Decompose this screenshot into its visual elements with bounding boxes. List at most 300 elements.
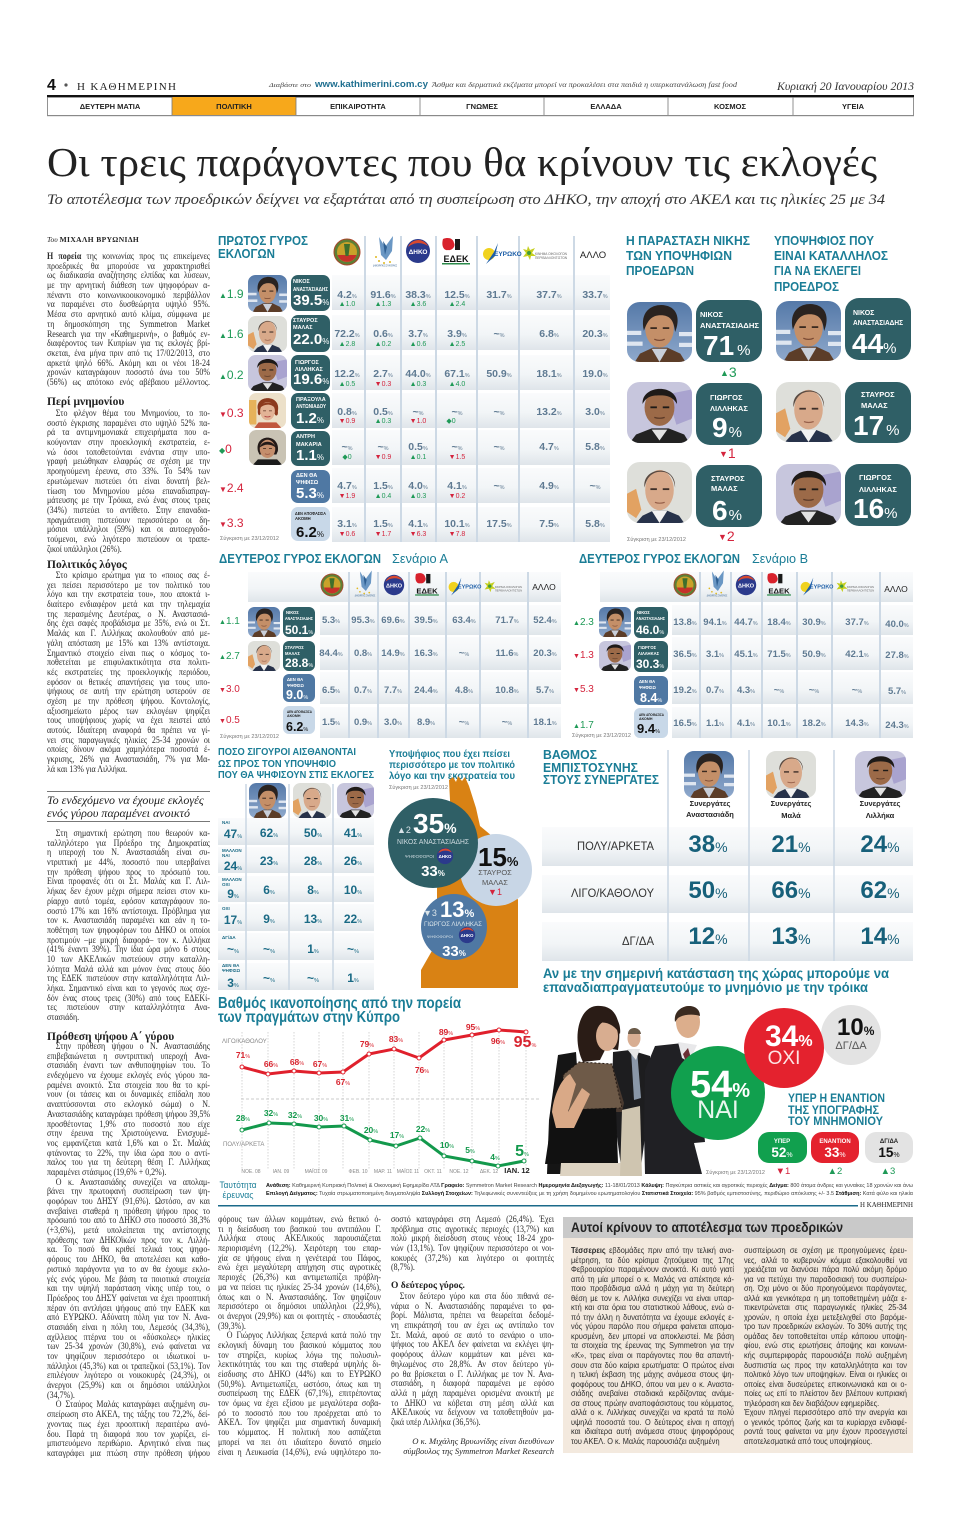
first round values: ▲0.3 (410, 381, 426, 388)
article: political speech: Μαλάς και Γ. Λιλλήκας ακολουθούν από με- (47, 628, 210, 638)
values: 71.5% (767, 649, 791, 660)
values: ~% (459, 648, 469, 659)
scenario A heading: ΔΕΥΤΕΡΟΣ ΓΥΡΟΣ ΕΚΛΟΓΩΝ (219, 551, 381, 566)
first round values: 0.8% (337, 406, 357, 418)
values: 50% (304, 826, 322, 840)
heading: memorandum: Περί μνημονίου (47, 396, 124, 408)
row labels: ΔΕΝ ΘΑ (222, 963, 240, 968)
candidate changes: ▲1.6 (219, 327, 244, 341)
article: memorandum: νώ όσοι τοποθετούνται ενάντια στην υπο- (47, 447, 210, 457)
values: 94.1% (703, 617, 727, 628)
circle: no votes 10 (821, 1005, 881, 1065)
article: second round: φοφόρους άλλων κομμάτων και μένει κα- (391, 1349, 554, 1359)
article: third column (391, 1214, 554, 1272)
article: second round: ΑΚΕΛικούς να δείχνουν να τοποθετηθούν μα- (391, 1407, 554, 1417)
article: opening paragraph: Research για την «Καθημερινή», ο βαθμός εν- (47, 328, 210, 338)
article: suitability: η υπεροχή του Ν. Αναστασιάδη είναι συ- (47, 847, 210, 857)
navigation bar: ΕΠΙΚΑΙΡΟΤΗΤΑ (330, 102, 386, 111)
first round values: ▼6.3 (410, 531, 426, 538)
captions: Συνεργάτες (690, 799, 731, 808)
panel text: decisive factors right: νες, αλλά το κυβερνών κόμμα εξακολουθεί να (744, 1255, 907, 1265)
values: 24% (224, 859, 242, 873)
panel text: decisive factors right: ση. Όχι μόνο οι δύο προηγούμενοι παράγοντες, (744, 1283, 907, 1293)
first round values: ◆0 (342, 454, 352, 461)
panel text: decisive factors right: δυσπιστία ως προς την καταλληλότητα και τον (744, 1360, 907, 1370)
values: 16.5% (673, 718, 697, 729)
Lillikas 16: ΓΙΩΡΓΟΣ (859, 473, 892, 482)
article: vote intention: ριστικό παράγοντα για το αν θα έχουμε εκλο- (47, 1264, 210, 1274)
article: opening paragraph: ως διαδικασία αναζήτησης ελπίδας και λύσεων, (47, 270, 210, 280)
candidate name boxes: ΨΗΦΙΣΩ (296, 480, 319, 486)
Anastasiades 71: ΝΙΚΟΣ (700, 310, 723, 319)
name boxes: 9.4% (637, 721, 660, 736)
article: political speech: κές εκστρατείες της προεκλογικής περιόδου, (47, 667, 210, 677)
row labels: ΟΧΙ (222, 882, 230, 887)
Lillikas 16 (845, 464, 911, 526)
survey identity label: Ταυτότητα (220, 1180, 257, 1191)
box: dk 15: ΔΓ/ΔΑ (880, 1139, 899, 1145)
values: ~% (502, 717, 512, 728)
article: memorandum: μάτευσης με την Τρόικα, ενώ ένας στους τρεις (47, 495, 210, 505)
circle: Lillikas 13 (421, 894, 487, 960)
survey identity strip (218, 1180, 914, 1209)
article: vote intention: κα. Το ποσό θα κριθεί τελικά τους ψηφο- (47, 1244, 210, 1254)
first round values: ▼0.2 (449, 493, 465, 500)
first round values: ▼0.3 (375, 381, 391, 388)
panel text: decisive factors right: οποίες είναι δυσεύρετες επικοινωνιακά και οι ο- (744, 1379, 907, 1389)
values: 4.3% (737, 685, 755, 696)
circle: Anastasiades 35: 35% (413, 808, 457, 839)
party logos: ΑΛΛΟ (884, 584, 908, 594)
article: suitability (47, 828, 210, 1022)
candidate name boxes: 1.1% (296, 447, 324, 464)
candidate changes: ▼3.3 (219, 516, 244, 530)
values (319, 615, 557, 728)
article: second column: ΑΚΕΛ. Τον ψηφίζει μια σημαντική δυναμική (218, 1417, 381, 1427)
article: vote intention: στην έρευνα της Χριστούγεννα. Ενισχυμέ- (47, 1128, 210, 1138)
renegotiation heading: επαναδιαπραγματευτούμε το μνημόνιο με την τρόικα (543, 979, 868, 995)
comparison note: Σύγκριση με 23/12/2012 (706, 1169, 765, 1176)
candidate name boxes: ΑΚΟΜΗ (295, 516, 311, 521)
row labels (222, 820, 242, 973)
article: second column: μα να πείσει τις ηλικίες 25-34 χρονών (14,6%), (218, 1282, 381, 1292)
panel text: decisive factors right: πικεντρώνεται στις παραγωγικές ηλικίες 25-34 (744, 1302, 907, 1312)
circle: Anastasiades 35: ΔΗΚΟ (439, 854, 452, 859)
article: second round: Στ. Μαλά, αφού σε αυτό το σενάριο ο υπο- (391, 1330, 554, 1340)
name boxes (634, 607, 668, 738)
article: second column: (39,3%). (218, 1321, 246, 1331)
party logos (334, 236, 606, 268)
newspaper name: Η ΚΑΘΗΜΕΡΙΝΗ (77, 81, 176, 93)
web promo: www.kathimerini.com.cy (314, 79, 429, 90)
article: vote intention: βάνει την πρωτοφανή συσπείρωση των ψη- (47, 1186, 210, 1196)
panel: memorandum (545, 1005, 913, 1177)
article: vote intention: σπείρωση στο ΑΚΕΛ, της τάξης του 72,2%, δεί- (47, 1409, 210, 1419)
first round heading: ΕΚΛΟΓΩΝ (218, 246, 275, 261)
circle: no 34: 34% (765, 1020, 813, 1053)
article: vote intention: στασιάδη έναντι των ανθυποψηφίων του. Το (47, 1060, 210, 1070)
article: vote intention: πρόθεσης των ΔΗΚΟϊκών προς τον κ. Λιλλή- (47, 1235, 210, 1245)
circle: Anastasiades 35: ΨΗΦΟΦΟΡΟΙ (405, 854, 434, 859)
series: not satisfied: 67% (313, 1059, 327, 1069)
axis labels: ΙΑΝ. 09 (273, 1169, 290, 1175)
changes: ▲2.3 (573, 617, 594, 628)
party logos: ΔΗΜΟΚΡΑΤΙΚΟΣ ΣΥΝΑΓΕΡΜΟΣ (707, 593, 727, 597)
article: second round: θηλωμένος στο 28,8%. Αν στον δεύτερο γύ- (391, 1359, 554, 1369)
trust heading (543, 748, 659, 787)
name boxes: ΔΕΝ ΑΠΟΦΑΣΙΣΑ (639, 713, 664, 717)
article: opening paragraph: διαφέροντος των Κυπρίων για τις εκλογές βρί- (47, 338, 210, 348)
first round values: ▼0.9 (339, 418, 355, 425)
article: suitability: την πρόθεση ψήφου προς το πρόσωπό του. (47, 867, 210, 877)
panel text: decisive factors left: «Κ», τρεις είναι οι παράγοντες που θα απαντή- (571, 1350, 734, 1360)
series: satisfied: 31% (340, 1113, 354, 1123)
first round heading (218, 233, 308, 261)
values: 37.7% (845, 617, 869, 628)
first round values: 3.1% (337, 518, 357, 530)
party logos: ΚΙΝΗΜΑ ΟΙΚΟΛΟΓΩΝ (847, 585, 874, 589)
comparison note: Σύγκριση με 23/12/2012 (572, 732, 631, 739)
article: vote intention: φοφόρων του ΔΗΣΥ (91,6%). Ωστόσο, αν και (47, 1196, 210, 1206)
article: vote intention: φτάνοντας το 22%, την ίδια ώρα που ο αντί- (47, 1148, 210, 1158)
article: memorandum (47, 408, 210, 554)
first round values: ▲0.1 (410, 454, 426, 461)
article: suitability: ποθέτηση των ψηφοφόρων του ΔΗΚΟ οι οποίοι (47, 925, 210, 935)
axis labels: ΟΚΤ. 11 (424, 1169, 442, 1175)
circle: Malas 15: ΣΤΑΥΡΟΣ (478, 868, 512, 877)
candidate name boxes: ΑΝΤΡΗ (296, 434, 315, 440)
article: vote intention: ενδεχόμενο να έχουμε εκλογές ενός γύρου πα- (47, 1070, 210, 1080)
comparison note: Σύγκριση με 23/12/2012 (220, 733, 279, 740)
article: vote intention: γές ενός γύρου. Με βάση τα ποιοτικά στοιχεία (47, 1274, 210, 1284)
article: vote intention: ραμένει ανοικτό. Στα στοιχεία που θα το κρί- (47, 1080, 210, 1090)
series: not satisfied: 76% (415, 1065, 429, 1075)
first round values: 19.0% (582, 368, 608, 380)
circle: Anastasiades 35: ▲2 (397, 825, 411, 835)
heading: political speech: Πολιτικός λόγος (47, 559, 127, 571)
values: 5.3% (322, 615, 340, 626)
article: second round: ζικά υπέρ Λιλλήκα (36,5%). (391, 1417, 481, 1427)
circle: Anastasiades 35 (388, 798, 478, 888)
first round values: ~% (412, 406, 424, 418)
article: vote intention: επιβεβαιώνεται η συντριπτική υπεροχή Ανα- (47, 1051, 210, 1061)
candidate changes: ◆0 (219, 442, 232, 456)
circle: Lillikas 13: 13% (440, 897, 474, 922)
values: 63.4% (452, 615, 476, 626)
candidate changes: ▲1.9 (219, 287, 244, 301)
article: opening paragraph: αρκετά ψηλό 66%. Ακόμη και οι νέοι 18-24 (47, 358, 210, 368)
panel text: decisive factors left: σα στους πρώην αναποφάσιστους του κόμματος, (571, 1398, 734, 1408)
memorandum heading: ΥΠΕΡ Η ΕΝΑΝΤΙΟΝ (788, 1093, 885, 1105)
first round values: ▼0.9 (375, 454, 391, 461)
first round values: ~% (493, 441, 505, 453)
candidate name boxes: 5.3% (296, 485, 324, 502)
circle: Malas 15: ▼1 (488, 887, 502, 897)
article: second column: είσδυσης στο ΔΗΚΟ (44%) και το ΕΥΡΩΚΟ (218, 1369, 381, 1379)
series: satisfied: 5% (515, 1143, 529, 1160)
article: second round: νη επικράτησή του αν έχει ως αντίπαλο τον (391, 1320, 554, 1330)
name boxes: ΑΝΑΣΤΑΣΙΑΔΗΣ (285, 616, 313, 621)
candidate name boxes: ΑΝΤΩΝΙΑΔΟΥ (296, 404, 326, 410)
article: suitability: ταλληλότερο για Πρόεδρο της Δημοκρατίας (47, 838, 210, 848)
values: 3.0% (384, 717, 402, 728)
panel text: decisive factors left: θέση με τον κ. Λιλλήκα συνεχίζει να είναι υπαρ- (571, 1293, 734, 1303)
row labels: ΜΑΛΛΟΝ (222, 848, 242, 853)
suitability heading: ΠΡΟΕΔΡΟΣ (774, 280, 839, 294)
article: memorandum: Στο φλέγον θέμα του Μνημονίου, το πο- (56, 408, 210, 418)
circle: Lillikas 13: 33% (442, 943, 466, 960)
candidate name boxes: 39.5% (293, 292, 329, 309)
panel text: decisive factors left: σιάδης ανεβαίνει σταδιακά κερδίζοντας ανάμε- (571, 1388, 734, 1398)
first round values: 4.7% (539, 441, 559, 453)
row labels: ΝΑΙ (222, 853, 230, 858)
article: suitability: λότητα Μαλά αλλά και μόνον ένας στους δύο (47, 964, 210, 974)
article: vote intention: Στην πρόθεση ψήφου ο Ν. Αναστασιάδης (56, 1041, 210, 1051)
first round values: 33.7% (582, 289, 608, 301)
first round values: 4.1% (447, 480, 467, 492)
values (224, 826, 362, 990)
panel text: decisive factors right: φίου, ενώ στις ερωτήσεις άποψης και κοινωνι- (744, 1340, 907, 1350)
article: third column: νών (13,1%). Τον ψηφίζουν περισσότερο οι νοι- (391, 1243, 554, 1253)
series: satisfied: 30% (314, 1113, 328, 1123)
circle: no votes 10: 10% (837, 1014, 875, 1041)
series: satisfied: 22% (416, 1124, 430, 1134)
chart heading: των πραγμάτων στην Κύπρο (218, 1009, 400, 1026)
web promo: Άσθμα και δερματικά εκζέματα μπορεί να προκαλέσει στα παιδιά η υπερκατανάλωση fast food (431, 81, 738, 89)
values: 71.7% (495, 615, 519, 626)
values: 14% (860, 923, 900, 950)
article: political speech: γάλη απόσταση με 15% και 13% αντίστοιχα. (47, 638, 210, 648)
panel text: decisive factors left: του ΑΚΕΛ. Ο κ. Μαλάς παρουσιάζει αυξημένη (571, 1436, 720, 1446)
Lillikas 9: ΓΙΩΡΓΟΣ (710, 393, 743, 402)
comparison note: Σύγκριση με 23/12/2012 (627, 536, 686, 543)
article: second round: στασιάδη, η διαφορά παραμένει με εφόσο (391, 1378, 554, 1388)
article: suitability: της ΕΔΕΚ πιστεύουν στην καταλληλότητα Λιλ- (47, 973, 210, 983)
box: dk 15: 15% (878, 1145, 900, 1160)
party logos: ΠΕΡΙΒΑΛΛΟΝΤΙΣΤΩΝ (495, 588, 522, 592)
name boxes: ΑΚΟΜΗ (287, 714, 301, 718)
decisive factors heading: Αυτοί κρίνουν το αποτέλεσμα των προεδρικών (571, 1219, 843, 1235)
series: satisfied: 4% (490, 1152, 500, 1162)
Lillikas 9 (696, 383, 762, 445)
article: political speech: διαίτερο ενδιαφέρον μετά και την τηλεμαχία (47, 599, 210, 609)
article: second column: ρό το ποσοστό που του προέρχεται από το (218, 1408, 381, 1418)
candidate name boxes: 1.2% (296, 410, 324, 427)
Anastasiades 71: ΑΝΑΣΤΑΣΙΑΔΗΣ (700, 321, 760, 330)
trust heading: ΒΑΘΜΟΣ (543, 748, 597, 762)
article: vote intention: χνοντας πως έχει προοπτική περαιτέρω ανό- (47, 1419, 210, 1429)
article: opening paragraph: με την αρνητική διάθεση των ψηφοφόρων α- (47, 280, 210, 290)
article: vote intention: πέραν ότι αντλήσει ψήφους από την ΕΔΕΚ και (47, 1303, 210, 1313)
article: opening paragraph: (56%) ως απότοκο ενός αβέβαιου μέλλοντος. (47, 377, 210, 387)
article: suitability: τες πιστεύουν στην καταλληλότητα Ανα- (47, 1002, 210, 1012)
box changes: ▲2 (828, 1166, 842, 1177)
panel text: decisive factors left: Φεβρουαρίου παραμένουν ανοικτά. Κι αυτό γιατί (571, 1264, 734, 1274)
article: third column: σοστό καταγράφει στη Λεμεσό (26,4%). Έχει (391, 1214, 554, 1224)
panel text: decisive factors left (571, 1245, 734, 1446)
circle: Malas 15: ΜΑΛΑΣ (482, 878, 508, 887)
article: vote intention: νος εμφανίζεται κατά 1,6% και ο Στ. Μαλάς (47, 1138, 210, 1148)
values: 20.3% (533, 648, 557, 659)
name boxes: ΛΙΛΛΗΚΑΣ (638, 651, 660, 656)
persuasion heading: λόγο και την εκστρατεία του (389, 770, 515, 782)
article: memorandum: γραφή μειώθηκαν ελαφρώς σε σχέση με την (47, 456, 210, 466)
article: vote intention: καταγράφει μια πτώση στην πρόθεση ψήφου (47, 1448, 210, 1458)
changes: ▼3.0 (219, 684, 240, 695)
panel: suitable candidate (774, 234, 911, 526)
name boxes: ΨΗΦΙΣΩ (639, 685, 657, 690)
first round values: 72.2% (334, 328, 360, 340)
name boxes: ΔΕΝ ΑΠΟΦΑΣΙΣΑ (287, 710, 312, 714)
article: political speech: γκρισης, 26% για Αναστασιάδη, 7% για Μα- (47, 754, 210, 764)
article: second round: αλλά η μάχη παραμένει ορισμένα ανοικτή με (391, 1388, 554, 1398)
panel text: decisive factors left: τα στοιχεία της έρευνας της Symmetron για την (571, 1340, 734, 1350)
name boxes: ΓΙΩΡΓΟΣ (638, 645, 657, 650)
party logos: ΕΔΕΚ (444, 254, 469, 264)
party logos: ΕΔΕΚ (416, 586, 438, 595)
series: not satisfied: 71% (236, 1050, 250, 1060)
article: second column: Λιλλήκα στους ΑΚΕΛικούς παρουσιάζεται (218, 1233, 381, 1243)
first round values: 4.0% (408, 480, 428, 492)
name boxes: 30.3% (636, 657, 664, 671)
first round values: 91.6% (370, 289, 396, 301)
circle: Lillikas 13: ▼3 (423, 908, 437, 918)
party logos: ΑΛΛΟ (580, 250, 606, 261)
article: third column: κοκυρές (37,2%) και λιγότερο οι φοιτητές (391, 1253, 554, 1263)
name boxes: ΣΤΑΥΡΟΣ (285, 645, 304, 650)
first round values: 13.2% (536, 406, 562, 418)
values: 13% (304, 912, 322, 926)
name boxes: ΑΝΑΣΤΑΣΙΑΔΗΣ (636, 616, 665, 621)
web promo (268, 79, 738, 90)
name boxes: ΑΚΟΜΗ (639, 717, 653, 721)
panel: trust in aides (542, 748, 913, 961)
values: 3% (227, 976, 239, 990)
callout: single-round election (47, 791, 210, 822)
survey details (266, 1182, 914, 1197)
article: opening paragraph: τη δημοσκόπηση της Symmetron Market (47, 319, 210, 329)
box: for 52: ΥΠΕΡ (774, 1139, 790, 1145)
article: vote intention: νουν (οι τάσεις και οι δυναμικές επίδαλη που (47, 1089, 210, 1099)
article: suitability: Στη σημαντική ερώτηση που θεωρούν κα- (56, 828, 210, 838)
callout: single-round election: ενός γύρου παραμένει ανοικτό (47, 806, 190, 820)
first round values: 20.3% (582, 328, 608, 340)
photo: people walking (545, 1006, 705, 1176)
values: 19.2% (673, 685, 697, 696)
values: 47% (224, 827, 242, 841)
Anastasiades 44: 44% (852, 328, 896, 359)
trust heading: ΕΜΠΙΣΤΟΣΥΝΗΣ (543, 761, 638, 775)
values: 95.3% (351, 615, 375, 626)
values: 50.9% (802, 649, 826, 660)
captions: Μαλά (781, 811, 801, 820)
memorandum heading (788, 1093, 885, 1128)
article: political speech: νει στις παραγωγικές ηλικίες 25-34 χρονών οι (47, 735, 210, 745)
name boxes: ΔΕΝ ΘΑ (287, 677, 303, 682)
row labels: ΛΙΓΟ/ΚΑΘΟΛΟΥ (571, 886, 654, 900)
values: 27.8% (885, 650, 909, 661)
values: ~% (263, 971, 275, 985)
panel text: decisive factors left: φοφόρους του ΔΗΚΟ, όπου ναι μεν ο κ. Αναστα- (571, 1379, 734, 1389)
values: 11.6% (496, 648, 519, 659)
party logos: ΠΕΡΙΒΑΛΛΟΝΤΙΣΤΩΝ (535, 256, 568, 260)
panel: second round scenario A (219, 551, 561, 740)
first round values: ▲0.2 (375, 341, 391, 348)
first round values: 3.0% (585, 406, 605, 418)
article: suitability: (41% έναντι 39%). Την ίδια ώρα μόνο 6 στους (47, 944, 210, 954)
first round values: ▼1.9 (339, 493, 355, 500)
article: second round: ψήφιος του ΑΚΕΛ δεν φαίνεται να εκλέγει ψη- (391, 1339, 554, 1349)
article: third column: πολύ μικρή διείσδυση στους νέους 18-24 χρο- (391, 1233, 554, 1243)
values: 9% (263, 912, 275, 926)
values: 69.6% (381, 615, 405, 626)
name boxes (283, 607, 315, 734)
date: Κυριακή 20 Ιανουαρίου 2013 (776, 81, 914, 93)
article: political speech: λόγο και την εκστρατεία του», που αποκτά ι- (47, 589, 210, 599)
suitability heading (774, 234, 888, 294)
series: not satisfied: 95% (466, 1022, 480, 1032)
panel: first round table (218, 233, 610, 542)
row labels: ΠΟΛΥ/ΑΡΚΕΤΑ (577, 839, 654, 853)
values: ~% (227, 942, 239, 956)
panel text: decisive factors left: υψηλά ποσοστά του. Ο δεύτερος είναι η αποχή (571, 1417, 734, 1427)
article: vote intention: Αναστασιάδης καταγράφει πρόθεση ψήφου 39,5% (47, 1109, 210, 1119)
candidate name boxes: ΔΕΝ ΘΑ (296, 473, 317, 479)
article: vote intention: επιλέγουν λιγότερο οι νοικοκυρές (24,3%), οι (47, 1370, 210, 1380)
first round values: ▲1.3 (375, 301, 391, 308)
box changes: ▼1 (776, 1166, 790, 1177)
circle: yes 54: 54% (690, 1064, 750, 1106)
Malas 6: ΣΤΑΥΡΟΣ (711, 474, 745, 483)
values: 44.7% (734, 617, 758, 628)
first round values: ▼1.5 (449, 454, 465, 461)
values: 39.5% (414, 615, 438, 626)
Lillikas 16: ΛΙΛΛΗΚΑΣ (859, 485, 897, 494)
row labels: ΟΧΙ (222, 906, 230, 911)
first round values: 2.7% (373, 368, 393, 380)
candidate name boxes: ΔΕΝ ΑΠΟΦΑΣΙΣΑ (295, 511, 326, 516)
article: vote intention (47, 1041, 210, 1458)
first round values: 37.7% (536, 289, 562, 301)
values: 40.0% (885, 619, 909, 630)
series: not satisfied: 67% (336, 1077, 350, 1087)
panel text: decisive factors right: για να πετύχει την παραδοσιακή του συσπείρω- (744, 1274, 907, 1284)
party logos: ΔΗΚΟ (386, 584, 403, 590)
panel text: decisive factors right: πολιτικό λόγο των υποψηφίων. Είναι οι ηλικίες οι (744, 1369, 907, 1379)
article: opening paragraph: προεδρικές θα μπορούσε να χαρακτηρισθεί (47, 261, 210, 271)
article: second column: τι η διείσδυση του βασικού του αντιπάλου Γ. (218, 1224, 381, 1234)
values: 52.4% (533, 615, 557, 626)
first round values: 12.5% (444, 289, 470, 301)
article: second column: χία σε ψήφους είναι η γενέτειρά του Πάφος, (218, 1253, 381, 1263)
article: vote intention: παλος του για τη δεύτερη θέση Γ. Λιλλήκας (47, 1157, 210, 1167)
values: ~% (774, 685, 784, 696)
article: political speech: δης έχει σαφές προβάδισμα με 35%, ενώ οι Στ. (47, 618, 210, 628)
article: political speech: χει πείσει περισσότερο με τον πολιτικό του (47, 580, 210, 590)
panel text: decisive factors right: κής συμπεριφοράς παρουσιάζει πολύ αυξημένη (744, 1350, 907, 1360)
captions: Αναστασιάδη (686, 810, 734, 819)
candidate name boxes: ΛΙΛΛΗΚΑΣ (295, 367, 323, 373)
values: 36.5% (673, 649, 697, 660)
values: 18.4% (767, 617, 791, 628)
series: satisfied (236, 1108, 529, 1168)
box: against 33: 33% (824, 1145, 846, 1160)
panel text: decisive factors right: τρο των προεδρικών εκλογών. Το 30% αυτής της (744, 1321, 907, 1331)
values: 21% (771, 831, 811, 858)
article: vote intention: μπιστευόμενο περιθώριο. Αρνητικό είναι πως (47, 1438, 210, 1448)
winner heading: ΠΡΟΕΔΡΩΝ (626, 264, 694, 278)
changes: ▼1.3 (573, 650, 594, 661)
